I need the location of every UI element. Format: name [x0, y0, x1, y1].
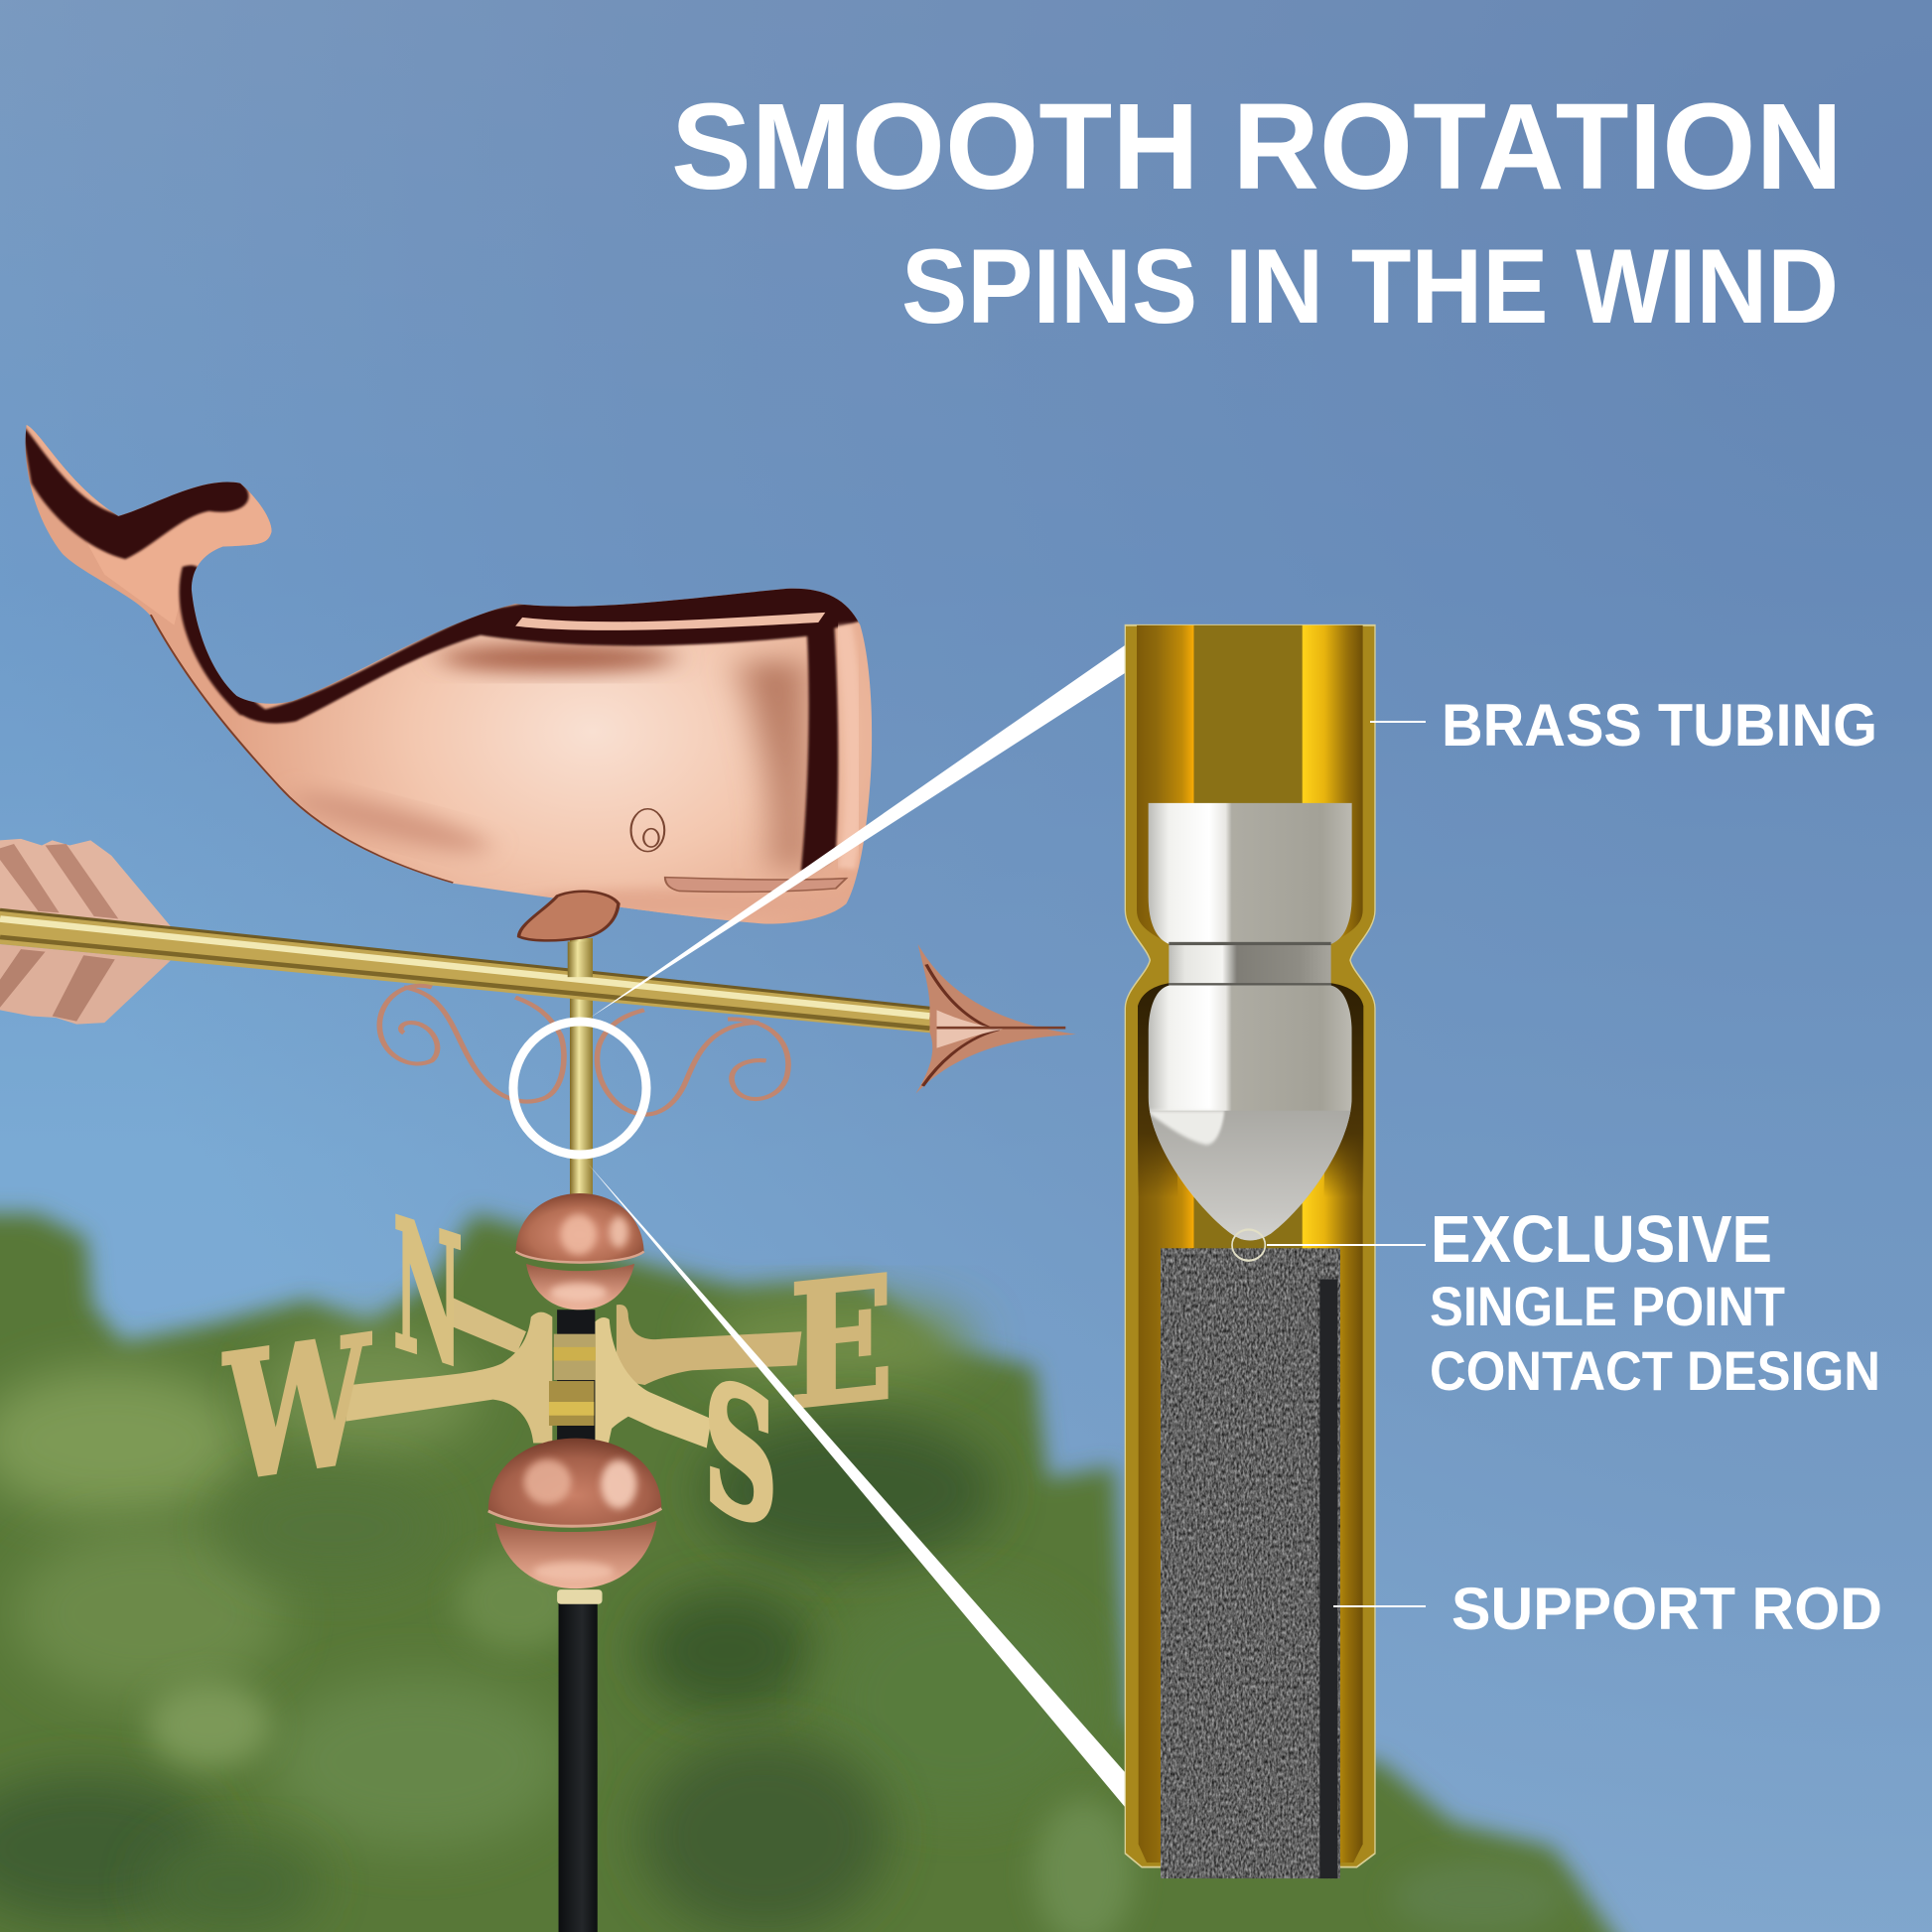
- grey support rod: [1161, 1248, 1340, 1878]
- label: exclusive single point contact design: CONTACT DESIGN: [1430, 1339, 1880, 1402]
- center black spindle: [557, 1310, 595, 1444]
- brass tube wall: [1125, 625, 1375, 1867]
- blurred trees background: [0, 1213, 1639, 1932]
- whale body: [26, 425, 872, 942]
- weathervane rod: [570, 938, 593, 1201]
- rod groove: [1319, 1279, 1337, 1878]
- label: exclusive single point contact design: [1430, 1202, 1880, 1402]
- label: brass tubing: BRASS TUBING: [1442, 692, 1877, 759]
- arrow feathers: [0, 839, 171, 1025]
- cutaway brass tube diagram: [1125, 625, 1375, 1878]
- whale fin: [519, 892, 619, 940]
- brass bearing stack: [549, 1334, 596, 1426]
- contact point oval: [1232, 1229, 1265, 1261]
- steel neck: [1169, 942, 1331, 986]
- leader line: contact design: [1267, 1244, 1426, 1246]
- tube inner upper: [1137, 625, 1363, 944]
- label: support rod: SUPPORT ROD: [1451, 1576, 1882, 1642]
- whale eye: [631, 809, 664, 852]
- compass directional assembly: [345, 1193, 801, 1932]
- label: exclusive single point contact design: EXCLUSIVE: [1431, 1202, 1772, 1277]
- compass letters: [223, 1179, 894, 1569]
- top copper ball: [516, 1193, 644, 1310]
- steel pointed bullet tip: [1148, 985, 1352, 1241]
- magnifier circle: [513, 1022, 646, 1155]
- brass collar: [557, 1589, 603, 1604]
- leader line: support rod: [1333, 1605, 1426, 1607]
- dark reflections on whale: [21, 423, 864, 871]
- title: smooth rotation: SMOOTH ROTATION: [671, 79, 1843, 215]
- arrow and whale weathervane top: [0, 397, 1076, 1115]
- arrowhead: [915, 944, 1076, 1094]
- letter W: W: [223, 1298, 371, 1521]
- arrow shaft: [0, 908, 930, 1033]
- subtitle: spins in the wind: SPINS IN THE WIND: [901, 226, 1839, 345]
- decorative copper scrolls: [379, 986, 788, 1115]
- callout wedge upper: [589, 645, 1125, 1019]
- letter E: E: [789, 1239, 894, 1448]
- letter S: S: [704, 1340, 777, 1569]
- label: exclusive single point contact design: SINGLE POINT: [1430, 1275, 1785, 1337]
- tube inner lower: [1139, 983, 1363, 1863]
- compass letters: N: [393, 1179, 463, 1410]
- callout wedge lower: [588, 1164, 1125, 1807]
- steel pivot cylinder: [1149, 803, 1352, 944]
- leader line: brass tubing: [1370, 721, 1426, 723]
- pole: [559, 1600, 598, 1932]
- whale mouth: [665, 878, 846, 892]
- compass arms: [345, 1298, 801, 1450]
- lower copper ball: [488, 1439, 661, 1588]
